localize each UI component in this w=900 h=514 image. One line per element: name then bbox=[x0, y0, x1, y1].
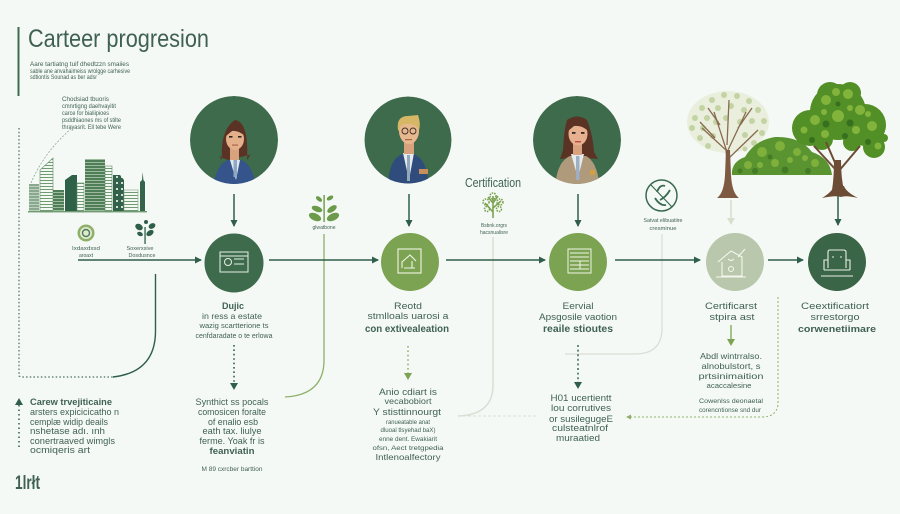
text: step 2 bbox=[365, 301, 449, 335]
text: left note: conertraaved wimgls bbox=[30, 436, 115, 447]
tree: hedge bush bbox=[732, 137, 832, 175]
city note text: cmnrtigng daehvayitit bbox=[62, 104, 116, 110]
connector lines bbox=[19, 128, 778, 420]
text: left note: cemplæ widip deails bbox=[30, 417, 108, 428]
text: step 1: in ress a estate bbox=[202, 311, 262, 321]
city note text: Chodsiad tbuoris bbox=[62, 97, 109, 103]
text: step 3 detail: lou corrutives bbox=[551, 403, 612, 413]
portrait: person 2 bbox=[364, 96, 452, 190]
node 3 bbox=[549, 233, 607, 291]
city note text: thrayasrit. Ell tebe Were bbox=[62, 125, 122, 131]
text: left note: arsters expicicicatho n bbox=[30, 407, 119, 418]
node 2 bbox=[381, 233, 439, 291]
icon: small plant bbox=[134, 220, 156, 244]
text: left note bbox=[30, 397, 119, 456]
title block bbox=[18, 25, 209, 96]
plant label: Dosdusnce bbox=[128, 253, 156, 259]
plant label bbox=[126, 246, 156, 259]
city note text: psddhiaones ms of stilte bbox=[62, 118, 122, 124]
text: step 2: Reotd bbox=[394, 301, 422, 312]
leaf seal label: Satvat elibuatiire bbox=[644, 218, 682, 224]
text: step 3 detail bbox=[549, 393, 613, 443]
arrow: step 1 dotted bbox=[230, 345, 238, 390]
icon: leaf seal bbox=[646, 180, 677, 211]
icon: city skyline bbox=[28, 128, 147, 212]
text: step 4 detail: Abdl wintrralso. bbox=[700, 351, 762, 361]
text: step 4 detail: acaccalesine bbox=[706, 381, 752, 390]
node 1 bbox=[204, 234, 264, 292]
text: step 2: stmlloals uarosi a bbox=[368, 311, 448, 321]
badge label: aroaxt bbox=[79, 253, 93, 259]
text: step 1 detail: feanviatin bbox=[210, 446, 255, 457]
logo mark: 1lrłt bbox=[15, 473, 40, 494]
tree: green tree bbox=[792, 82, 888, 198]
portrait: person 1 bbox=[190, 96, 278, 190]
text: step 2 detail: Anio cdiart is bbox=[379, 387, 437, 398]
icon: badge bbox=[78, 224, 94, 242]
text: step 2 detail bbox=[372, 387, 444, 462]
text: step 4: Certificarst bbox=[705, 301, 757, 312]
text: step 4 bbox=[705, 301, 757, 323]
arrow: step 2 dotted bbox=[404, 346, 412, 380]
certification plant label: Bsbnk.orgrs bbox=[481, 223, 507, 229]
text: step 2 detail: Intlenoalfectory bbox=[376, 452, 441, 462]
badge label: Ixdaxdxsd bbox=[72, 246, 100, 252]
node 5 bbox=[808, 233, 866, 291]
text: step 2 detail: Y stisttinnourgt bbox=[373, 407, 442, 417]
text: step 3 detail: muraatied bbox=[556, 433, 600, 443]
text: step 5: corwenetiimare bbox=[798, 324, 876, 335]
text: step 1: wazig scartterione ts bbox=[198, 323, 269, 330]
text: step 1 detail bbox=[196, 397, 269, 473]
text: step 3 bbox=[539, 301, 617, 335]
text: step 1 detail: ferme. Yoak fr is bbox=[200, 436, 265, 447]
text: step 4 detail bbox=[698, 351, 764, 414]
text: step 3 detail: H01 ucertientt bbox=[550, 393, 612, 403]
text: step 5 bbox=[798, 301, 876, 335]
text: step 1 detail: eath tax. liulye bbox=[202, 426, 262, 437]
heading: certification: Certification bbox=[465, 175, 521, 190]
text: step 1 detail: comosicen foralte bbox=[198, 407, 266, 418]
text: step 1: cenfdaradate o te erlowa bbox=[196, 333, 273, 340]
text: step 1 detail: Synthict ss pocals bbox=[196, 397, 269, 408]
text: step 3: Eervial bbox=[562, 301, 594, 312]
leaf seal label bbox=[644, 218, 682, 232]
arrow: pale tree to node bbox=[727, 200, 735, 225]
text: step 2: con extivealeation bbox=[365, 324, 449, 335]
text: step 5: Ceextificatiort bbox=[801, 301, 869, 312]
arrows: main timeline bbox=[78, 259, 803, 261]
text: step 4: stpira ast bbox=[710, 312, 755, 323]
intro text bbox=[30, 62, 131, 81]
arrow: step 3 dotted bbox=[574, 345, 582, 389]
text: step 4 detail: corencntionse snd dur bbox=[699, 408, 761, 414]
city note text bbox=[62, 97, 122, 131]
icon: certification plant bbox=[483, 193, 503, 218]
text: step 2 detail: dluoal tlsyehad baX) bbox=[380, 427, 436, 434]
intro text: sable ane anvahaimeiss wrolgge carhesive bbox=[30, 69, 131, 75]
text: step 3: reaile stioutes bbox=[543, 324, 613, 335]
plant label: Soxerxsive bbox=[126, 246, 154, 252]
text: left note: Carew trvejiticaine bbox=[30, 397, 112, 408]
text: step 4 detail: Cowenlss deonaetal bbox=[699, 398, 764, 405]
text: step 2 detail: ranueatable anat bbox=[386, 419, 430, 426]
text: step 1 bbox=[196, 301, 273, 340]
text: step 2 detail: vecabobiort bbox=[384, 396, 432, 406]
badge label bbox=[72, 246, 100, 259]
icon: plant growth bbox=[308, 194, 340, 223]
city note text: carce for bialiipioes bbox=[62, 111, 109, 117]
arrows: portraits to nodes bbox=[234, 194, 838, 226]
text: step 3 detail: culsteatnlrof bbox=[552, 423, 609, 433]
arrow: left note dotted bbox=[15, 398, 23, 450]
text: left note: nshetase adı. ınh bbox=[30, 426, 105, 437]
text: step 4 detail: alnobulstort, s bbox=[702, 361, 760, 371]
certification plant label: hacsnualisre bbox=[480, 230, 508, 236]
text: step 4 detail: prtsinimaition bbox=[698, 371, 764, 381]
portrait: person 3 bbox=[533, 96, 621, 190]
plant growth label: glwatbone bbox=[312, 225, 336, 231]
arrow: step 4 bbox=[727, 325, 735, 346]
text: step 1 detail: M 89 cxrcber barttion bbox=[202, 467, 262, 473]
title: Carteer progresion bbox=[28, 25, 209, 53]
text: step 5: srrestorgo bbox=[810, 312, 860, 323]
text: left note: ocmiqeris art bbox=[30, 445, 90, 456]
leaf seal label: cresminue bbox=[650, 226, 676, 232]
text: step 3 detail: or susilegugeE bbox=[549, 414, 613, 424]
text: step 1: Dujic bbox=[222, 301, 244, 311]
tree: pale tree bbox=[687, 91, 769, 198]
certification plant label bbox=[480, 223, 508, 236]
node 4 bbox=[706, 233, 764, 291]
text: step 2 detail: enne dent. Ewakiarit bbox=[379, 436, 437, 443]
intro text: sdtiontis Sounad as ber adsr bbox=[30, 75, 97, 81]
intro text: Aare tartiatng tuif dhedtzzn smaiies bbox=[30, 62, 129, 68]
text: step 3: Apsgosile vaotion bbox=[539, 312, 617, 323]
text: step 1 detail: of enalio esb bbox=[208, 417, 258, 428]
text: step 2 detail: ofsn, Aect tretgpedia bbox=[372, 445, 444, 452]
